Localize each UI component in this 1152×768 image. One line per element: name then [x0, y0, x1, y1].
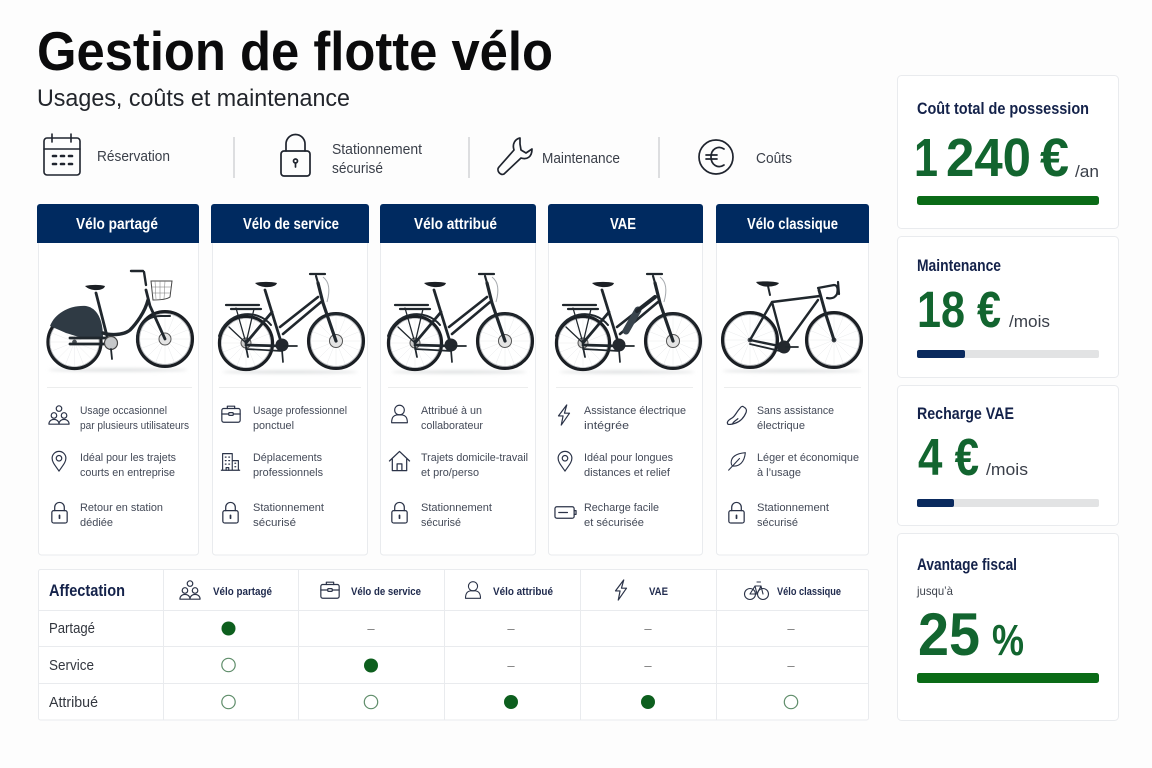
row: partagé: –	[644, 621, 652, 636]
feature: trajets courts: courts en entreprise	[80, 467, 175, 479]
header	[716, 204, 869, 243]
KPI: coût total de possession	[898, 76, 1118, 228]
row: service: –	[787, 658, 795, 673]
header: VAE	[610, 216, 636, 233]
feature: déplacements	[221, 452, 323, 479]
feature: léger et économique: à l’usage	[757, 467, 801, 479]
row: service: –	[644, 658, 652, 673]
feature: sans assistance	[727, 405, 834, 432]
feature: stationnement: Stationnement	[421, 502, 493, 514]
panel: vélo partagé	[37, 204, 199, 555]
row: partagé: –	[367, 621, 375, 636]
panel: vélo classique	[716, 204, 869, 555]
feature: retour en station: Retour en station	[80, 502, 163, 514]
column: vélo partagé: Vélo partagé	[213, 586, 272, 598]
label: stationnement sécurisé	[332, 142, 422, 177]
feature: trajets domicile-travail: Trajets domicile-travail	[421, 452, 528, 464]
panel: VAE	[548, 204, 703, 555]
KPI: avantage fiscal: 25	[918, 601, 980, 668]
feature: stationnement: Stationnement	[253, 502, 325, 514]
feature: stationnement: sécurisé	[757, 517, 798, 529]
label: réservation: Réservation	[97, 149, 170, 165]
header: Vélo de service	[243, 216, 339, 233]
feature: stationnement: sécurisé	[421, 517, 461, 529]
title: Gestion de flotte vélo	[37, 20, 553, 82]
KPI: avantage fiscal: %	[992, 616, 1024, 665]
KPI: recharge VAE	[898, 386, 1118, 526]
header	[37, 204, 199, 243]
feature: retour en station: dédiée	[80, 517, 113, 529]
feature: sans assistance: Sans assistance	[757, 405, 834, 417]
feature: léger et économique	[729, 452, 859, 479]
feature: trajets domicile-travail: et pro/perso	[421, 467, 479, 479]
feature: retour en station	[52, 502, 163, 529]
feature: usage occasionnel	[49, 405, 189, 432]
row: service: Service	[49, 658, 94, 674]
feature: léger et économique: Léger et économique	[757, 452, 859, 464]
panel: vélo attribué	[380, 204, 536, 555]
feature: stationnement	[729, 502, 830, 529]
label: maintenance: Maintenance	[542, 151, 620, 167]
icon: calendar	[44, 134, 80, 175]
table: affectation matrix	[38, 569, 869, 720]
panel: vélo de service	[211, 204, 369, 555]
row: service: –	[507, 658, 515, 673]
label: stationnement sécurisé: Stationnement	[332, 142, 422, 158]
column: vélo attribué: Vélo attribué	[493, 586, 553, 598]
feature: stationnement	[223, 502, 325, 529]
feature: recharge: Recharge facile	[584, 502, 659, 514]
feature strip	[44, 134, 792, 178]
feature: recharge: et sécurisée	[584, 517, 644, 529]
feature: assistance électrique: Assistance électrique	[584, 405, 686, 417]
feature: trajets domicile-travail	[389, 451, 528, 479]
KPI: coût total de possession: /an	[1075, 162, 1099, 181]
row: attribué	[49, 695, 798, 711]
bike illustration: classic road bike	[722, 281, 862, 372]
KPI: maintenance	[898, 236, 1118, 378]
feature: assistance électrique: intégrée	[584, 420, 629, 432]
column: vélo de service: Vélo de service	[351, 586, 421, 598]
KPI: coût total de possession: Coût total de possession	[917, 100, 1089, 118]
KPI: coût total de possession: €	[1040, 128, 1069, 188]
feature: stationnement	[392, 502, 493, 529]
KPI: coût total de possession: 1	[914, 128, 938, 188]
row: partagé: –	[787, 621, 795, 636]
bike illustration: assigned bike	[388, 274, 532, 374]
feature: usage occasionnel: par plusieurs utilisateurs	[80, 420, 189, 432]
feature: attribué: collaborateur	[421, 420, 483, 432]
KPI: avantage fiscal	[898, 534, 1118, 720]
feature: déplacements: professionnels	[253, 467, 323, 479]
table heading: Affectation	[49, 582, 125, 600]
header: Vélo partagé	[76, 216, 158, 233]
subtitle: Usages, coûts et maintenance	[37, 85, 350, 112]
feature: trajets courts: Idéal pour les trajets	[80, 452, 176, 464]
icon: euro	[699, 140, 733, 174]
KPI: maintenance: /mois	[1009, 312, 1050, 331]
row: partagé	[49, 621, 795, 637]
header	[380, 204, 536, 243]
column: VAE	[616, 580, 668, 600]
header	[211, 204, 369, 243]
KPI: recharge VAE: /mois	[986, 460, 1028, 479]
feature: usage professionnel	[222, 405, 347, 432]
row: partagé: –	[507, 621, 515, 636]
feature: sans assistance: électrique	[757, 420, 805, 432]
KPI: avantage fiscal: Avantage fiscal	[917, 556, 1017, 574]
header	[548, 204, 703, 243]
column: vélo attribué	[466, 582, 553, 598]
KPI: maintenance: Maintenance	[917, 257, 1001, 275]
feature: trajets courts	[52, 451, 176, 479]
column: vélo classique: Vélo classique	[777, 586, 841, 598]
feature: attribué	[392, 405, 483, 432]
feature: longues distances: Idéal pour longues	[584, 452, 673, 464]
column: vélo classique	[744, 582, 841, 600]
feature: stationnement: Stationnement	[757, 502, 830, 514]
feature: assistance électrique	[558, 405, 686, 432]
bike illustration: electric bike	[556, 274, 700, 374]
header: Vélo attribué	[414, 216, 497, 233]
feature: stationnement: sécurisé	[253, 517, 296, 529]
bike illustration: shared bike	[48, 271, 192, 372]
label: coûts: Coûts	[756, 151, 792, 167]
icon: padlock	[281, 134, 310, 176]
KPI: recharge VAE: Recharge VAE	[917, 405, 1014, 423]
feature: longues distances: distances et relief	[584, 467, 671, 479]
feature: recharge	[555, 502, 659, 529]
KPI: recharge VAE: 4 €	[918, 429, 979, 487]
KPI: avantage fiscal: jusqu’à	[916, 584, 953, 598]
row: attribué: Attribué	[49, 695, 98, 711]
row: service	[49, 658, 795, 674]
feature: usage professionnel: Usage professionnel	[253, 405, 347, 417]
feature: longues distances	[558, 451, 673, 479]
feature: attribué: Attribué à un	[421, 405, 482, 417]
row: partagé: Partagé	[49, 621, 95, 637]
feature: usage professionnel: ponctuel	[253, 420, 294, 432]
icon: wrench	[498, 138, 532, 174]
label: stationnement sécurisé: sécurisé	[332, 161, 383, 177]
feature: usage occasionnel: Usage occasionnel	[80, 405, 167, 417]
bike illustration: service bike	[219, 274, 363, 374]
column: VAE: VAE	[649, 586, 668, 598]
feature: déplacements: Déplacements	[253, 452, 322, 464]
KPI: coût total de possession: 240	[946, 128, 1031, 188]
header: Vélo classique	[747, 216, 838, 233]
column: vélo de service	[321, 582, 421, 598]
KPI: maintenance: 18 €	[917, 281, 1001, 338]
column: vélo partagé	[180, 581, 272, 599]
